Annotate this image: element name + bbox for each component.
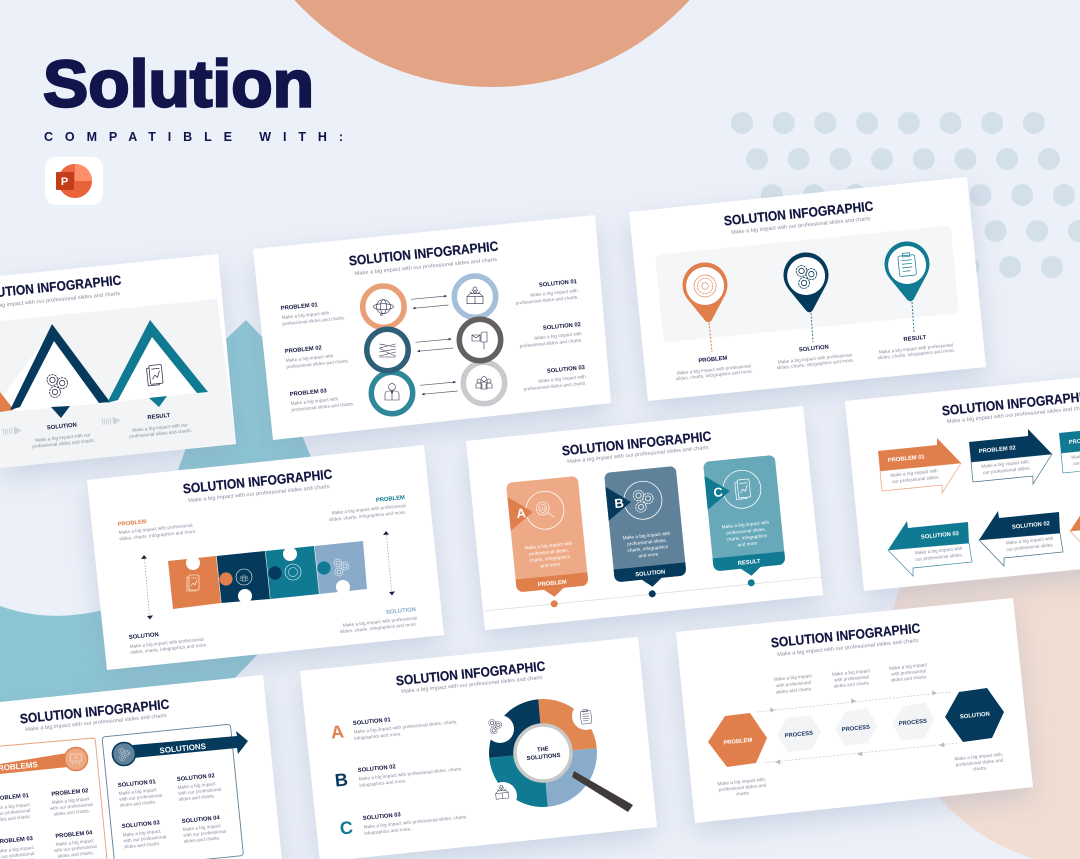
text: solution right: Make a big impact with professional <box>343 615 417 628</box>
text: problem 01: Make a big impact with <box>281 310 330 320</box>
arrow: problem 03 <box>1059 420 1080 475</box>
text: solution note <box>954 752 1005 773</box>
text: solution 02: with our professional <box>178 787 221 796</box>
hexagon: solution <box>945 688 1004 742</box>
slide 8: magnifier donut <box>300 637 657 859</box>
donut bites <box>486 702 600 810</box>
slide 4: puzzle <box>87 445 444 670</box>
card B: and more <box>638 551 659 558</box>
text: solution 02: SOLUTION 02 <box>358 764 396 774</box>
text: solution 02 <box>358 758 463 788</box>
text: solution: professional slides and charts. <box>32 438 95 449</box>
connector arrowheads <box>770 690 944 764</box>
text: problem left <box>118 514 197 541</box>
subheading: Make a big impact with our professional slides and charts <box>946 405 1080 425</box>
text: solution: SOLUTION <box>47 423 77 431</box>
icon: bulb box <box>495 785 509 799</box>
text: solution note: professional slides and <box>955 758 1004 767</box>
text: problem 02: slides and charts. <box>53 808 90 817</box>
text: problem 01 <box>0 793 32 823</box>
card B: professional slides, <box>627 538 667 547</box>
text: solution 02: slides and charts. <box>179 793 215 802</box>
text: problem 01: professional slides and charts. <box>282 315 345 326</box>
text: process 1 <box>774 673 814 695</box>
card A: professional slides, <box>529 548 569 557</box>
text: solution 01: SOLUTION 01 <box>118 779 157 789</box>
teal background shape left <box>0 606 262 720</box>
text: solution 01: Make a big impact <box>118 787 157 796</box>
hexagon: process 2 <box>835 708 877 746</box>
hexagon: process 2: PROCESS <box>841 725 870 733</box>
text: solution right: slides, charts, infographics and more. <box>340 621 418 634</box>
donut chart <box>502 712 584 794</box>
text: solution 01: SOLUTION 01 <box>353 717 392 727</box>
text: problem: PROBLEM <box>698 356 728 364</box>
peach circle bottom right <box>887 452 1080 859</box>
text: problem 03: professional slides and charts. <box>291 401 354 412</box>
text: solution 02 <box>518 322 583 349</box>
text: problem 03: Make a big impact with <box>290 396 339 406</box>
subheading: Make a big impact with our professional slides and charts <box>401 675 543 695</box>
text: problem 02 <box>48 788 93 817</box>
arrow: problem 01 <box>878 438 961 493</box>
text: solution 03: Make a big impact with professional slides, charts, <box>363 814 468 829</box>
icon: gears <box>47 373 69 398</box>
banner: solutions <box>112 731 248 766</box>
text: solution note: charts. <box>973 765 987 772</box>
text: solution 01: SOLUTION 01 <box>539 279 578 289</box>
main title: Solution <box>43 46 314 120</box>
text: solution 01: with our professional <box>119 793 162 802</box>
text: solution 02: SOLUTION 02 <box>543 322 581 332</box>
grey panel <box>655 226 959 343</box>
magnifier handle <box>572 771 633 812</box>
text: problem 04 <box>52 830 97 859</box>
text: process 1: slides and charts. <box>776 686 813 695</box>
text: problem right: PROBLEM <box>376 495 405 504</box>
center label: SOLUTIONS <box>527 753 561 762</box>
card A: PROBLEM <box>538 579 567 588</box>
puzzle pieces <box>168 541 367 609</box>
card A: A <box>516 505 527 521</box>
subtitle: compatible with: COMPATIBLE WITH: <box>44 130 343 144</box>
text: problem left: PROBLEM <box>118 519 147 528</box>
heading: SOLUTION INFOGRAPHIC <box>723 199 874 228</box>
card C: professional slides, <box>726 527 766 536</box>
slide 2: circles <box>253 215 611 440</box>
slide 1: triangles <box>0 254 236 468</box>
double arrow right <box>383 531 395 596</box>
text: problem 02: Make a big impact with <box>285 353 334 363</box>
card C <box>703 455 787 590</box>
text: problem right: Make a big impact with professional <box>331 503 406 515</box>
text: solution 03 <box>363 806 468 836</box>
navy chevron <box>10 324 110 410</box>
card A: and more <box>540 561 561 568</box>
text: solution 03: SOLUTION 03 <box>547 365 586 375</box>
text: solution 02: SOLUTION 02 <box>177 773 215 783</box>
text: problem 02 <box>285 343 349 369</box>
slide 5: cards <box>466 406 823 630</box>
hexagon: process 1 <box>777 715 821 752</box>
hexagon: solution: SOLUTION <box>960 712 990 720</box>
card A: Make a big impact with <box>524 541 573 550</box>
card C: C <box>713 484 724 500</box>
text: result: professional slides and charts. <box>129 428 192 439</box>
text: solution <box>30 421 95 449</box>
icon: PowerPoint <box>45 157 103 205</box>
text: process 3 <box>889 662 929 683</box>
text: problem 02: Make a big impact <box>51 796 91 805</box>
arrow: problem 02 <box>969 429 1052 484</box>
text: result <box>127 411 192 439</box>
text: solution 02 <box>177 773 222 802</box>
center label: THE <box>537 746 549 754</box>
card B <box>604 466 688 601</box>
text: solution: Make a big impact with professional <box>778 352 852 365</box>
text: problem left: slides, charts, infographics and more. <box>119 529 197 541</box>
heading: SOLUTION INFOGRAPHIC <box>348 239 499 268</box>
text: solution 02: Make a big impact <box>177 781 216 790</box>
card C: and more <box>737 540 758 547</box>
navy marker <box>51 406 70 418</box>
text: problem <box>674 353 753 381</box>
heading: SOLUTION INFOGRAPHIC <box>182 467 333 496</box>
text: solution 01: professional slides and charts. <box>515 294 579 306</box>
arrow: problem 01: our professional slides. <box>892 474 940 484</box>
text: process 2: slides and charts. <box>834 680 870 689</box>
subheading: Make a big impact with our professional slides and charts <box>777 638 919 658</box>
card A <box>506 476 590 611</box>
text: process 2: with professional <box>834 674 869 683</box>
dashed connectors <box>757 692 957 763</box>
text: solution 03: SOLUTION 03 <box>122 820 161 830</box>
text: solution 01: infographics and more. <box>354 731 402 741</box>
text: solution: Make a big impact with our <box>35 432 91 443</box>
text: problem note: Make a big impact with, <box>717 777 766 786</box>
white triangle backgrounds <box>0 330 108 412</box>
hexagon: process 3: PROCESS <box>898 719 927 727</box>
card B: charts, infographics <box>627 544 669 553</box>
text: solution 03: infographics and more. <box>364 826 412 836</box>
arrow: problem 02: Make a big impact with <box>981 459 1029 469</box>
text: problem 03: PROBLEM 03 <box>290 388 328 398</box>
grey band <box>0 299 236 468</box>
text: problem 03 <box>290 386 354 412</box>
text: problem 02: PROBLEM 02 <box>285 345 322 355</box>
teal background shape middle <box>178 320 312 470</box>
box: problems <box>0 738 108 859</box>
text: solution 03 <box>122 820 167 849</box>
heading: SOLUTION INFOGRAPHIC <box>561 429 712 458</box>
heading: SOLUTION INFOGRAPHIC <box>395 659 546 688</box>
puzzle icons <box>187 559 349 591</box>
text: solution 02: Make a big impact with <box>534 331 582 341</box>
letter C: C <box>339 817 354 839</box>
text: solution: SOLUTION <box>799 345 829 353</box>
text: solution 03: with our professional <box>123 834 166 843</box>
letter A: A <box>330 721 345 743</box>
arrows <box>411 296 458 394</box>
dashed connectors <box>709 302 914 352</box>
arrow: solution 03: our professional slides. <box>915 552 963 562</box>
text: result <box>876 332 955 360</box>
text: solution 04: slides and charts. <box>184 835 220 844</box>
text: problem left: Make a big impact with professional <box>118 523 193 535</box>
peach circle top <box>224 0 760 87</box>
arrow: solution 03 <box>888 521 972 576</box>
slide 6: arrows <box>845 367 1080 591</box>
box: solutions <box>102 724 243 859</box>
text: process 3: Make a big impact <box>889 662 928 671</box>
card B: Make a big impact with <box>622 531 671 540</box>
text: solution left: SOLUTION <box>129 632 159 641</box>
text: solution 04: SOLUTION 04 <box>182 815 221 825</box>
text: solution 03: slides and charts. <box>124 841 160 849</box>
text: solution 03: Make a big impact <box>122 829 161 837</box>
text: problem 02: professional slides and charts. <box>286 358 349 369</box>
arrow: problem 01: PROBLEM 01 <box>888 454 926 464</box>
icon: clipboard <box>580 709 592 724</box>
arrow: solution 03: Make a big impact with <box>915 546 963 555</box>
text: process 3: slides and charts. <box>891 674 927 683</box>
subheading: Make a big impact with our professional slides and charts <box>731 216 871 236</box>
arrow: solution 02 <box>979 511 1063 566</box>
arrow: solution 01 <box>1070 502 1080 557</box>
arrow: grey stripes 2 <box>102 416 121 426</box>
icons <box>373 287 492 400</box>
text: problem: slides, charts, infographics and more. <box>676 369 753 381</box>
dot pattern <box>731 112 1080 278</box>
text: problem note: charts. <box>736 790 750 797</box>
subheading: Make a big impact with our professional slides and charts <box>567 445 709 465</box>
text: result: RESULT <box>147 413 171 421</box>
text: solution 01 <box>353 711 458 741</box>
center label <box>526 745 561 762</box>
icon: document <box>146 364 163 386</box>
text: solution left <box>129 627 208 655</box>
orange chevron <box>0 392 14 412</box>
arrow: grey stripes 1 <box>3 426 22 436</box>
text: result: slides, charts, infographics and more. <box>878 348 955 360</box>
text: solution 02: Make a big impact with professional slides, charts, <box>358 766 463 781</box>
banner: solutions: SOLUTIONS <box>159 742 207 755</box>
text: solution 02: infographics and more. <box>359 778 407 788</box>
text: solution 04: Make a big impact <box>182 823 221 832</box>
text: solution 04 <box>182 815 227 844</box>
card A: charts, infographics <box>529 554 571 563</box>
text: problem 04: PROBLEM 04 <box>55 830 93 840</box>
circle rings <box>363 276 505 414</box>
text: process 2 <box>832 668 872 689</box>
text: problem 02: with our professional <box>50 802 93 811</box>
subheading: Make a big impact with our professional slides and charts <box>354 257 498 277</box>
icon: PowerPoint: P <box>61 176 68 188</box>
text: solution: slides, charts, infographics and more. <box>777 358 854 370</box>
text: problem 02: PROBLEM 02 <box>51 788 89 798</box>
text: problem 04: with our professional <box>54 844 97 853</box>
text: solution <box>775 342 854 370</box>
hexagon: process 1: PROCESS <box>784 731 813 739</box>
text: problem note <box>717 777 768 798</box>
icon: gears <box>488 719 503 734</box>
text: solution note: Make a big impact with, <box>954 752 1003 761</box>
text: solution 01: Make a big impact with <box>530 288 578 298</box>
text: problem 01 <box>281 300 345 326</box>
text: problem note: professional slides and <box>718 783 767 792</box>
arrow: problem 02: PROBLEM 02 <box>979 445 1016 455</box>
text: process 1: Make a big impact <box>774 673 813 682</box>
text: problem 04: slides and charts. <box>57 850 94 859</box>
card C: charts, infographics <box>726 533 768 542</box>
hexagon: process 3 <box>892 702 934 741</box>
text: result: Make a big impact with professional <box>879 342 953 355</box>
text: solution right <box>338 607 418 634</box>
teal marker <box>149 396 167 407</box>
text: solution 01: slides and charts. <box>120 799 156 808</box>
text: problem right <box>327 495 407 522</box>
banner: problems <box>0 748 87 774</box>
pin: problem <box>680 260 731 325</box>
text: solution 01: Make a big impact with professional slides, charts, <box>353 719 458 734</box>
timeline <box>484 577 822 611</box>
text: problem right: slides, charts, infographics and more. <box>329 509 407 522</box>
text: process 3: with professional <box>891 668 926 677</box>
arrow: solution 02: SOLUTION 02 <box>1012 521 1050 531</box>
card B: SOLUTION <box>635 569 665 578</box>
text: solution 03 <box>522 365 587 392</box>
text: solution 01 <box>118 779 163 808</box>
text: solution 03: Make a big impact with <box>538 374 586 384</box>
card C: Make a big impact with <box>721 520 770 529</box>
text: problem 04: Make a big impact <box>55 838 95 847</box>
text: result: Make a big impact with our <box>132 422 188 433</box>
heading: SOLUTION INFOGRAPHIC <box>770 621 921 650</box>
text: solution 03: professional slides and charts. <box>523 380 587 392</box>
hexagon: problem: PROBLEM <box>723 738 753 746</box>
card B: B <box>614 495 624 511</box>
text: problem: Make a big impact with professional <box>677 363 751 376</box>
slide 3: pins <box>629 177 986 401</box>
slide 9: hexagons <box>676 598 1033 823</box>
arrow: solution 02: Make a big impact with <box>1006 536 1054 545</box>
teal chevron <box>107 320 208 403</box>
subheading: Make a big impact with our professional slides and charts <box>25 713 167 733</box>
hexagon: problem <box>708 713 767 767</box>
text: solution 04: with our professional <box>183 829 226 838</box>
text: solution 02: professional slides and charts. <box>519 337 583 349</box>
text: process 2: Make a big impact <box>832 668 871 677</box>
arrow: solution 03: SOLUTION 03 <box>921 531 960 541</box>
text: problem 01: PROBLEM 01 <box>281 302 319 312</box>
text: result: RESULT <box>903 335 927 343</box>
heading: SOLUTION INFOGRAPHIC <box>19 697 170 726</box>
arrow: problem 01: Make a big impact with <box>890 468 938 478</box>
arrow: problem 02: our professional slides. <box>983 465 1031 475</box>
subheading: Make a big impact with our professional slides and charts <box>188 484 330 504</box>
pin: solution <box>781 250 832 315</box>
text: solution left: slides, charts, infographics and more. <box>130 642 208 655</box>
text: solution 03: SOLUTION 03 <box>363 812 402 822</box>
arrow: solution 02: our professional slides. <box>1006 542 1054 552</box>
magnifier lens <box>515 725 571 781</box>
pin: result <box>882 239 933 304</box>
text: solution right: SOLUTION <box>386 607 416 616</box>
text: solution left: Make a big impact with professional <box>129 637 204 649</box>
card C: RESULT <box>738 559 761 567</box>
slide 7: problems and solutions <box>0 675 285 859</box>
double arrow left <box>141 555 153 620</box>
text: solution 01 <box>514 279 579 306</box>
letter B: B <box>334 769 349 791</box>
text: process 1: with professional <box>776 680 811 688</box>
text: problem 03 <box>0 836 36 859</box>
